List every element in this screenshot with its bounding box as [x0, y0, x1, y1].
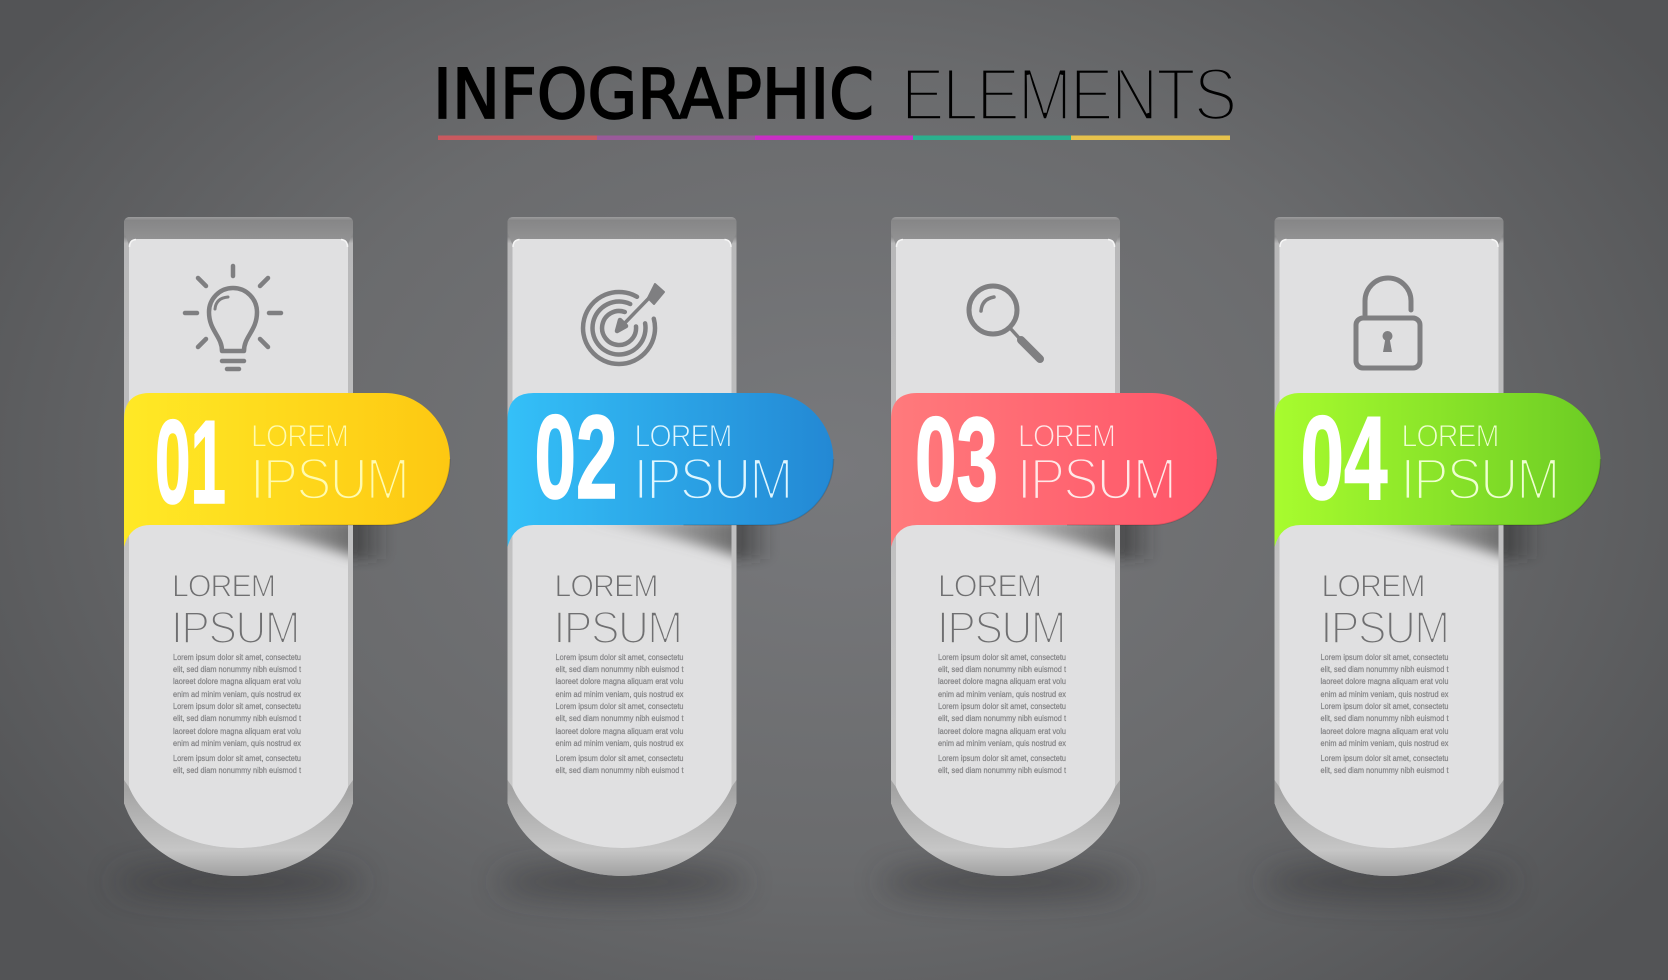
ribbon label: IPSUM	[1017, 447, 1175, 512]
ribbon: 03	[891, 393, 1217, 547]
card body text: enim ad minim veniam, quis nostrud ex	[556, 738, 684, 748]
ribbon label: LOREM	[634, 418, 732, 454]
ribbon label: IPSUM	[1400, 447, 1558, 512]
ribbon shadow	[992, 525, 1150, 566]
card body text: enim ad minim veniam, quis nostrud ex	[556, 689, 684, 699]
card body text: enim ad minim veniam, quis nostrud ex	[1320, 738, 1449, 748]
ribbon label	[634, 418, 792, 512]
panel: step 04	[1264, 217, 1600, 898]
card body text: elit, sed diam nonummy nibh euismod t	[173, 765, 302, 775]
ribbon shadow	[224, 525, 382, 565]
card body text: laoreet dolore magna aliquam erat volu	[173, 676, 301, 686]
card body text: elit, sed diam nonummy nibh euismod t	[938, 713, 1067, 723]
card body text: elit, sed diam nonummy nibh euismod t	[173, 664, 302, 674]
card body text: elit, sed diam nonummy nibh euismod t	[1320, 765, 1449, 775]
card body text: elit, sed diam nonummy nibh euismod t	[556, 713, 684, 723]
card body text: laoreet dolore magna aliquam erat volu	[1320, 676, 1449, 686]
card body text: Lorem ipsum dolor sit amet, consectetu	[938, 753, 1066, 763]
card heading	[937, 568, 1065, 653]
card heading: LOREM	[554, 568, 658, 604]
card body text: elit, sed diam nonummy nibh euismod t	[1320, 713, 1449, 723]
card heading: IPSUM	[937, 602, 1065, 653]
ribbon: 04	[1274, 393, 1600, 547]
number 04: 04	[1300, 392, 1388, 525]
card body text: laoreet dolore magna aliquam erat volu	[173, 726, 301, 736]
ribbon label: LOREM	[1402, 418, 1498, 454]
title underline	[438, 136, 1230, 140]
ribbon: 02	[508, 393, 834, 547]
card body text	[1320, 652, 1449, 775]
card body text: Lorem ipsum dolor sit amet, consectetu	[1320, 753, 1449, 763]
number 01: 01	[155, 396, 226, 529]
card body text: elit, sed diam nonummy nibh euismod t	[556, 765, 684, 775]
panel: step 02	[496, 217, 834, 898]
title	[433, 53, 1235, 136]
card body text	[173, 652, 302, 775]
number 03: 03	[915, 393, 998, 526]
ribbon: 01	[124, 393, 450, 547]
card body text: Lorem ipsum dolor sit amet, consectetu	[173, 652, 301, 662]
card body text: Lorem ipsum dolor sit amet, consectetu	[938, 701, 1066, 711]
card body text	[938, 652, 1067, 775]
card body text: elit, sed diam nonummy nibh euismod t	[938, 765, 1067, 775]
ribbon shadow	[1374, 525, 1532, 564]
card body text: elit, sed diam nonummy nibh euismod t	[938, 664, 1067, 674]
card body text: laoreet dolore magna aliquam erat volu	[1320, 726, 1449, 736]
card heading: IPSUM	[171, 602, 299, 653]
ribbon label: LOREM	[251, 418, 348, 454]
card body text: elit, sed diam nonummy nibh euismod t	[556, 664, 684, 674]
card body text: enim ad minim veniam, quis nostrud ex	[938, 689, 1067, 699]
card body text: Lorem ipsum dolor sit amet, consectetu	[556, 701, 684, 711]
card heading	[1320, 568, 1448, 653]
ribbon label: LOREM	[1018, 418, 1115, 454]
card body text	[556, 652, 684, 775]
card body text: Lorem ipsum dolor sit amet, consectetu	[938, 652, 1066, 662]
ribbon label	[250, 418, 408, 512]
card body text: Lorem ipsum dolor sit amet, consectetu	[1320, 652, 1449, 662]
card body text: enim ad minim veniam, quis nostrud ex	[173, 738, 302, 748]
card body text: laoreet dolore magna aliquam erat volu	[938, 676, 1066, 686]
card heading: LOREM	[1322, 568, 1424, 604]
number 02: 02	[534, 391, 618, 524]
card body text: enim ad minim veniam, quis nostrud ex	[173, 689, 302, 699]
ribbon label: IPSUM	[250, 447, 408, 512]
card body text: Lorem ipsum dolor sit amet, consectetu	[556, 652, 684, 662]
card body text: enim ad minim veniam, quis nostrud ex	[1320, 689, 1449, 699]
card heading: LOREM	[172, 568, 275, 604]
card body text: Lorem ipsum dolor sit amet, consectetu	[173, 753, 301, 763]
ribbon shadow	[608, 525, 770, 566]
title: elements: ELEMENTS	[901, 53, 1235, 136]
icon: padlock	[1356, 278, 1420, 368]
card body text: elit, sed diam nonummy nibh euismod t	[173, 713, 302, 723]
panel: step 03	[880, 217, 1217, 898]
card heading: IPSUM	[554, 602, 682, 653]
icon: magnifier	[969, 286, 1040, 359]
card heading	[554, 568, 682, 653]
card heading	[171, 568, 299, 653]
card body text: Lorem ipsum dolor sit amet, consectetu	[173, 701, 301, 711]
card body text: enim ad minim veniam, quis nostrud ex	[938, 738, 1067, 748]
card body text: Lorem ipsum dolor sit amet, consectetu	[556, 753, 684, 763]
card body text: elit, sed diam nonummy nibh euismod t	[1320, 664, 1449, 674]
title: infographic: INFOGRAPHIC	[433, 55, 874, 135]
card heading: LOREM	[938, 568, 1041, 604]
panel: step 01	[113, 217, 450, 898]
card body text: Lorem ipsum dolor sit amet, consectetu	[1320, 701, 1449, 711]
ribbon label	[1400, 418, 1558, 512]
card heading: IPSUM	[1320, 602, 1448, 653]
card body text: laoreet dolore magna aliquam erat volu	[938, 726, 1066, 736]
ribbon label	[1017, 418, 1175, 512]
icon: target with arrow	[583, 284, 664, 364]
card body text: laoreet dolore magna aliquam erat volu	[556, 726, 684, 736]
icon: light bulb	[185, 266, 281, 369]
ribbon label: IPSUM	[634, 447, 792, 512]
card body text: laoreet dolore magna aliquam erat volu	[556, 676, 684, 686]
